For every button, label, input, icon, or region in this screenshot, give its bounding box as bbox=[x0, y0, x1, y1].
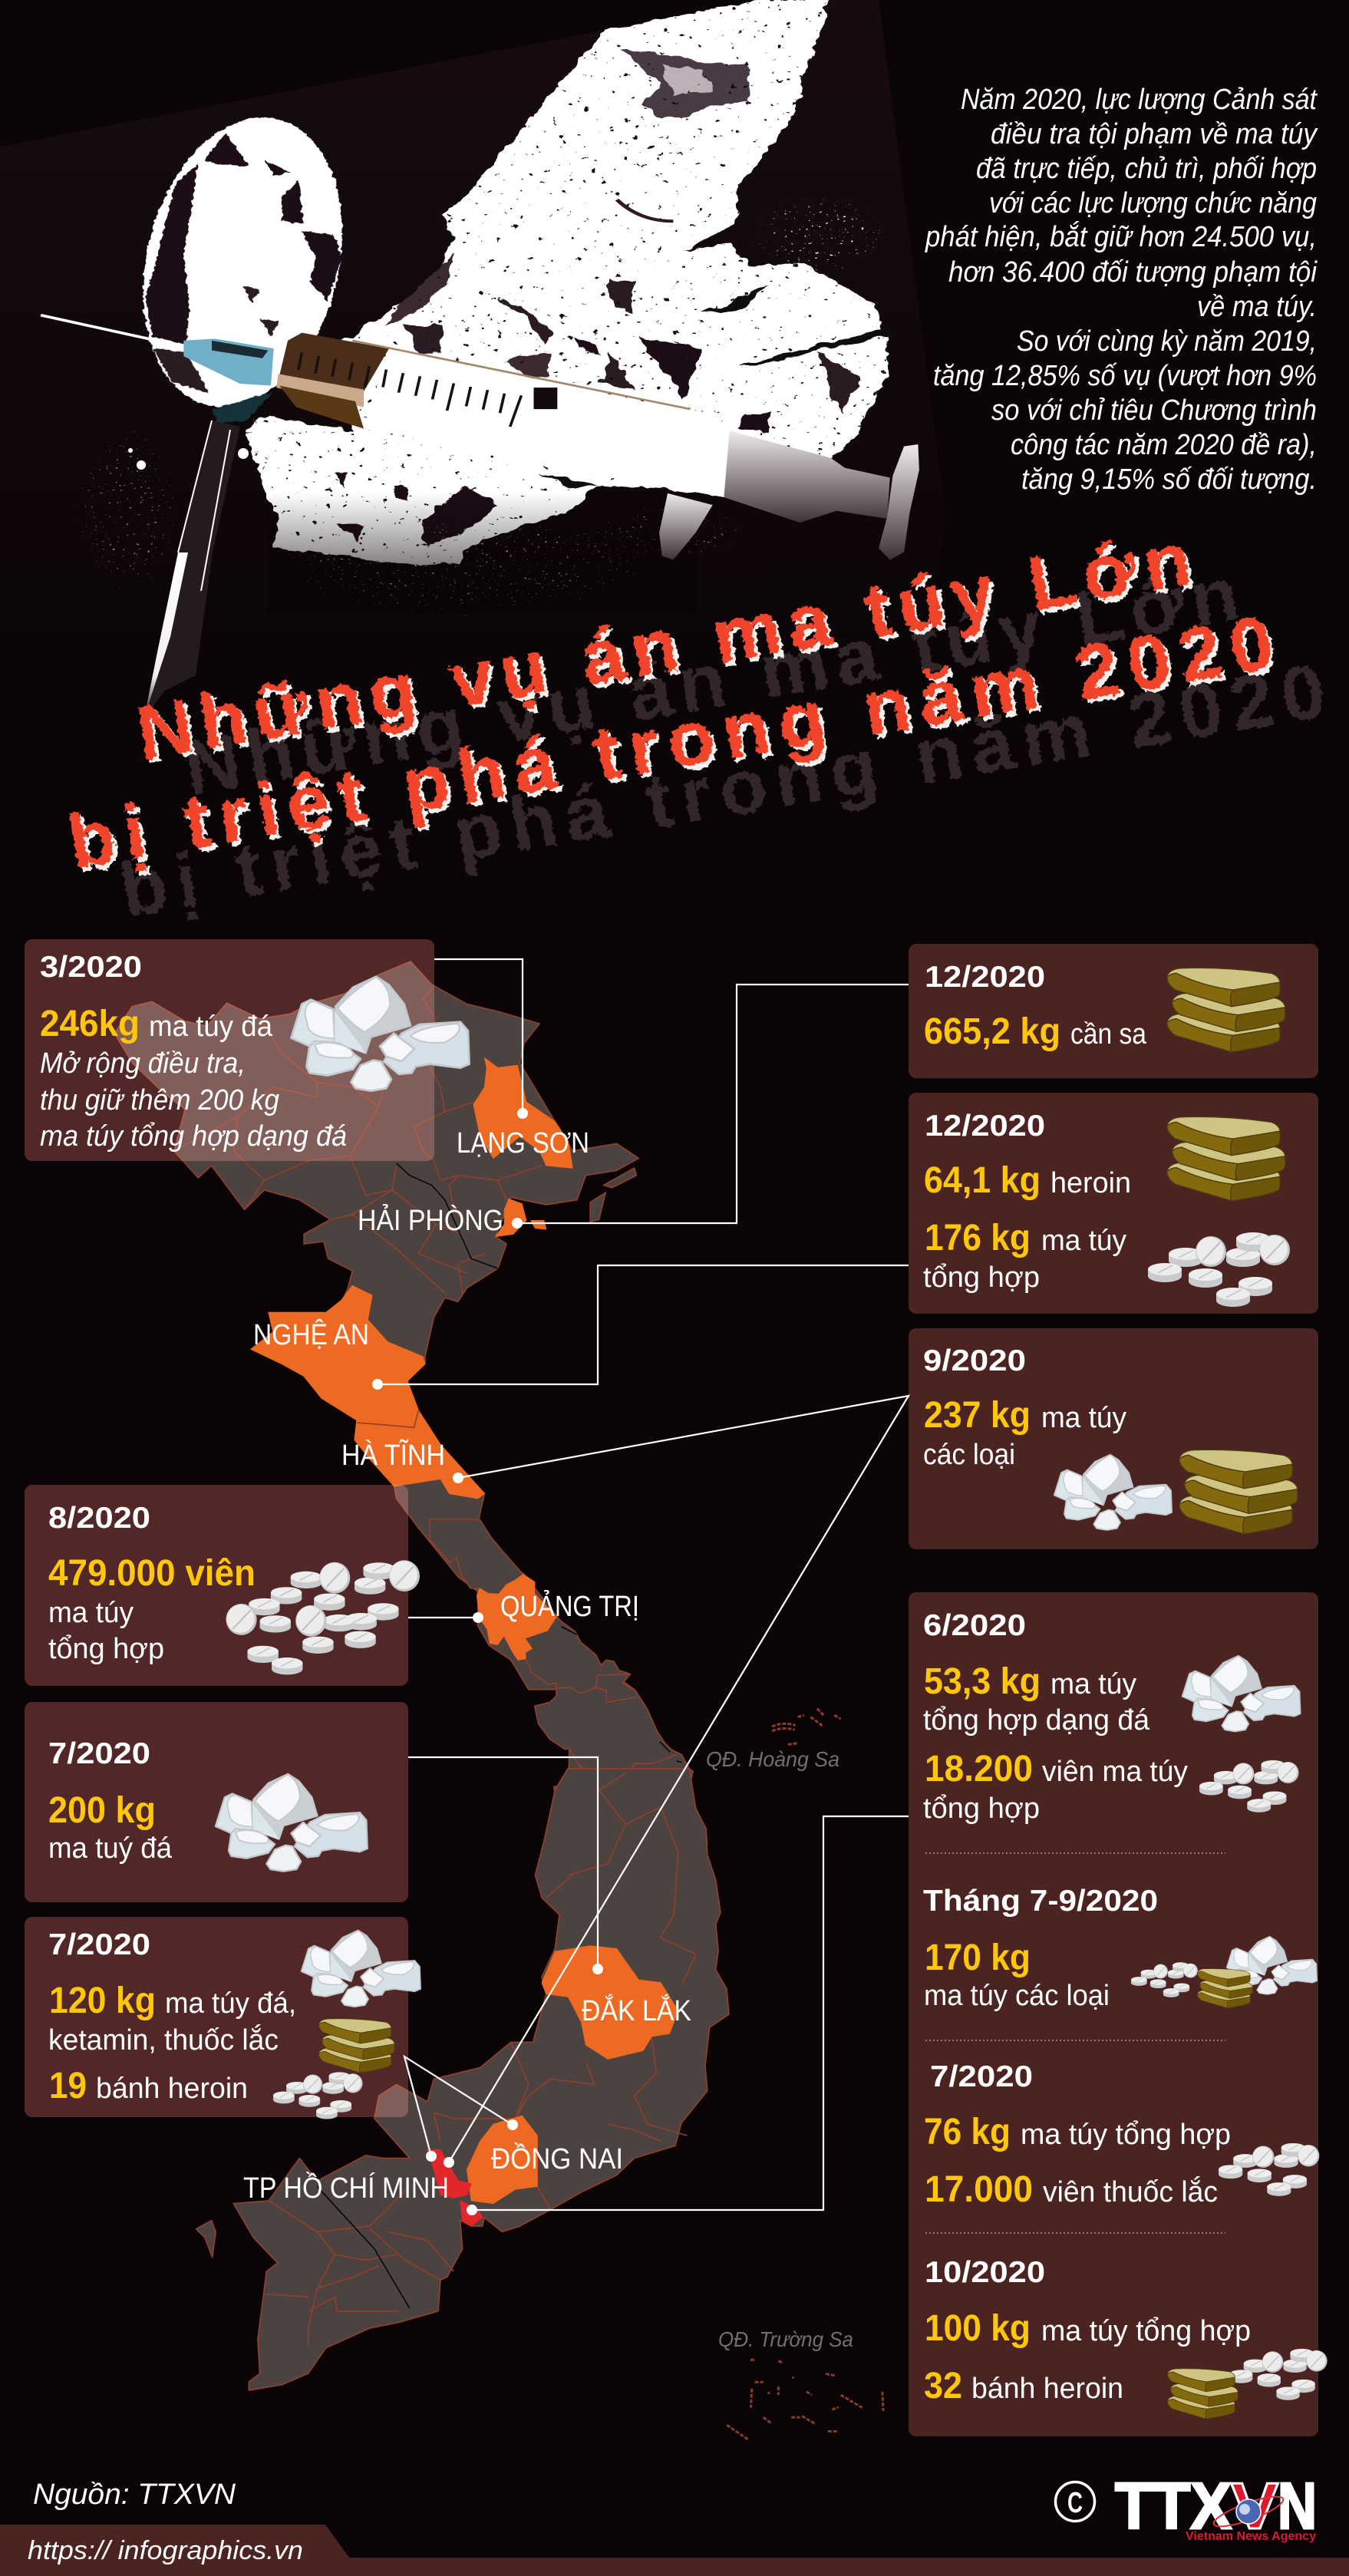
map labels: NGHỆ AN bbox=[253, 1318, 369, 1351]
panel: 6/2020 to 10/2020 list bbox=[909, 1592, 1328, 2436]
panel: 3/2020 bbox=[25, 939, 470, 1161]
panel: 3/2020: 3/2020 bbox=[40, 951, 142, 984]
panel: 7/2020 ice: 7/2020 bbox=[48, 1737, 150, 1770]
panel: 7/2020 ice: 200 kg bbox=[48, 1790, 156, 1831]
location dots bbox=[372, 1108, 603, 2215]
intro paragraph: công tác năm 2020 đề ra), bbox=[1011, 429, 1317, 461]
intro paragraph: với các lực lượng chức năng bbox=[989, 187, 1317, 219]
panel: 12/2020 heroin: 12/2020 bbox=[925, 1110, 1045, 1143]
intro paragraph: So với cùng kỳ năm 2019, bbox=[1017, 325, 1317, 358]
logo: globe bbox=[1211, 2491, 1286, 2532]
panel: 6/2020 to 10/2020 list: 6/2020 bbox=[923, 1609, 1026, 1642]
photo: syringe bbox=[276, 333, 919, 560]
map labels: QUẢNG TRỊ bbox=[500, 1589, 639, 1623]
panel: 7/2020 mixed bbox=[25, 1917, 421, 2119]
panel: 7/2020 ice: ma tuý đá bbox=[48, 1832, 173, 1865]
panel: 8/2020: ma túy bbox=[48, 1597, 134, 1629]
panel: 12/2020 cannabis: 12/2020 bbox=[925, 961, 1045, 994]
map labels: HẢI PHÒNG bbox=[358, 1203, 503, 1237]
title: Những vụ án ma túy Lớn bbox=[130, 516, 1197, 777]
panel: 3/2020: thu giữ thêm 200 kg bbox=[40, 1084, 279, 1116]
logo: TTXVN: N bbox=[1278, 2470, 1317, 2543]
panel: 6/2020 to 10/2020 list: tổng hợp dạng đá bbox=[923, 1704, 1150, 1737]
panel: 8/2020: 8/2020 bbox=[48, 1502, 150, 1535]
panel: 12/2020 heroin: tổng hợp bbox=[923, 1262, 1040, 1294]
copyright symbol: C bbox=[1067, 2487, 1083, 2519]
photo: spoon handle bbox=[128, 421, 249, 717]
map: central region bbox=[430, 1519, 707, 1844]
panel: 7/2020 mixed: 7/2020 bbox=[48, 1928, 150, 1961]
panel: 9/2020: ma túy bbox=[1041, 1402, 1126, 1434]
panel: 12/2020 heroin bbox=[909, 1093, 1318, 1314]
panel: 6/2020 to 10/2020 list: tổng hợp bbox=[923, 1793, 1040, 1825]
panel: 12/2020 heroin: 64,1 kg bbox=[924, 1160, 1041, 1201]
panel: 7/2020 mixed: 120 kg bbox=[49, 1981, 156, 2021]
panel: 6/2020 to 10/2020 list: 32 bbox=[924, 2366, 962, 2406]
title ghost shadow: Những vụ án ma túy Lớn bbox=[178, 551, 1245, 812]
panel: 6/2020 to 10/2020 list: ma túy tổng hợp bbox=[1041, 2315, 1251, 2347]
panel: 9/2020: 9/2020 bbox=[923, 1344, 1026, 1377]
panel: 8/2020: tổng hợp bbox=[48, 1633, 164, 1665]
map labels: TP HỒ CHÍ MINH bbox=[243, 2171, 449, 2205]
source: Nguồn: TTXVN bbox=[33, 2479, 236, 2511]
map labels bbox=[243, 1127, 691, 2205]
panel: 6/2020 to 10/2020 list: 100 kg bbox=[925, 2308, 1031, 2349]
panel: 7/2020 mixed: ketamin, thuốc lắc bbox=[48, 2024, 279, 2057]
title: bị triệt phá trong năm 2020 bbox=[61, 599, 1279, 886]
panel: 6/2020 to 10/2020 list: viên thuốc lắc bbox=[1043, 2175, 1218, 2208]
map labels: LẠNG SƠN bbox=[457, 1127, 589, 1159]
panel: 6/2020 to 10/2020 list: 76 kg bbox=[924, 2112, 1011, 2152]
panel: 9/2020: 237 kg bbox=[924, 1395, 1031, 1436]
panel: 7/2020 ice bbox=[25, 1702, 408, 1902]
photo: spoon bbox=[121, 110, 364, 423]
logo: TTXVN: Vietnam News Agency bbox=[1186, 2530, 1316, 2543]
map: Hoàng Sa islands bbox=[772, 1709, 841, 1744]
panel: 6/2020 to 10/2020 list: 7/2020 bbox=[930, 2060, 1033, 2093]
photo: spoon, syringe and white powder bbox=[0, 0, 946, 767]
photo: fade of the powder bbox=[268, 493, 696, 615]
footer bar with website: https:// infographics.vn bbox=[28, 2536, 303, 2565]
map labels: HÀ TĨNH bbox=[341, 1439, 445, 1472]
panel: 12/2020 heroin: 176 kg bbox=[925, 1218, 1031, 1258]
map: northern region bbox=[114, 961, 638, 1690]
photo: bag crease bbox=[617, 200, 673, 221]
map: southern region bbox=[196, 1769, 729, 2390]
panel: 7/2020 mixed: ma túy đá, bbox=[165, 1987, 296, 2020]
panel: 6/2020 to 10/2020 list: 18.200 bbox=[925, 1749, 1033, 1789]
intro paragraph: về ma túy. bbox=[1197, 291, 1317, 323]
intro paragraph: Năm 2020, lực lượng Cảnh sát bbox=[961, 84, 1318, 116]
panel: 3/2020: 246kg bbox=[40, 1004, 140, 1044]
icon: pile of pills bbox=[226, 1560, 420, 1674]
panel: 8/2020: 479.000 viên bbox=[48, 1553, 256, 1594]
panel: 6/2020 to 10/2020 list: 170 kg bbox=[925, 1938, 1031, 1978]
panel: 12/2020 heroin: ma túy bbox=[1041, 1225, 1126, 1257]
island label: Trường Sa: QĐ. Trường Sa bbox=[718, 2327, 853, 2351]
intro paragraph: tăng 12,85% số vụ (vượt hơn 9% bbox=[933, 360, 1317, 392]
photo: scattered powder bbox=[77, 196, 887, 618]
map of Vietnam bbox=[114, 961, 883, 2439]
intro paragraph: tăng 9,15% số đối tượng. bbox=[1021, 463, 1317, 496]
map labels: ĐỒNG NAI bbox=[491, 2142, 623, 2175]
panel: 12/2020 cannabis bbox=[909, 944, 1318, 1078]
map: Trường Sa islands bbox=[727, 2360, 883, 2439]
logo: TTXVN bbox=[1115, 2470, 1317, 2543]
panel: 9/2020 bbox=[909, 1328, 1318, 1549]
photo: needle and hub bbox=[41, 315, 274, 386]
panel: 6/2020 to 10/2020 list: viên ma túy bbox=[1042, 1756, 1188, 1788]
title: Những vụ án ma túy Lớn bbox=[134, 519, 1201, 780]
intro paragraph: điều tra tội phạm về ma túy bbox=[991, 118, 1318, 150]
island label: Hoàng Sa: QĐ. Hoàng Sa bbox=[706, 1747, 839, 1771]
intro paragraph: so với chỉ tiêu Chương trình bbox=[991, 394, 1317, 427]
logo: TTXVN: V bbox=[1231, 2470, 1278, 2543]
title ghost shadow: bị triệt phá trong năm 2020 bbox=[114, 648, 1331, 934]
panel: 6/2020 to 10/2020 list: 53,3 kg bbox=[924, 1661, 1041, 1702]
panel: 6/2020 to 10/2020 list: Tháng 7-9/2020 bbox=[923, 1885, 1158, 1918]
logo: TTXVN: TTX bbox=[1115, 2470, 1232, 2543]
panel: 3/2020: ma túy tổng hợp dạng đá bbox=[40, 1120, 347, 1153]
copyright symbol bbox=[1056, 2482, 1094, 2522]
panel: 9/2020: các loại bbox=[923, 1439, 1015, 1471]
panel: 6/2020 to 10/2020 list: ma túy các loại bbox=[924, 1980, 1110, 2012]
map labels: ĐẮK LẮK bbox=[582, 1994, 691, 2027]
panel: 3/2020: Mở rộng điều tra, bbox=[40, 1047, 246, 1080]
panel: 7/2020 mixed: 19 bbox=[49, 2066, 87, 2106]
panel: 12/2020 cannabis: cần sa bbox=[1070, 1018, 1147, 1051]
connector lines bbox=[378, 959, 909, 2210]
panel: 12/2020 heroin: heroin bbox=[1051, 1167, 1131, 1199]
intro paragraph bbox=[925, 84, 1318, 496]
panel: 6/2020 to 10/2020 list: ma túy tổng hợp bbox=[1021, 2119, 1231, 2151]
panel: 6/2020 to 10/2020 list: ma túy bbox=[1051, 1668, 1136, 1700]
intro paragraph: đã trực tiếp, chủ trì, phối hợp bbox=[976, 153, 1317, 185]
panel: 6/2020 to 10/2020 list: 10/2020 bbox=[925, 2256, 1045, 2289]
footer bar with website bbox=[0, 2525, 1349, 2576]
panel: 6/2020 to 10/2020 list: 17.000 bbox=[925, 2169, 1033, 2210]
intro paragraph: hơn 36.400 đối tượng phạm tội bbox=[948, 256, 1318, 289]
photo: bag and powder bbox=[246, 0, 890, 564]
panel: 7/2020 mixed: bánh heroin bbox=[96, 2073, 248, 2105]
panel: 12/2020 cannabis: 665,2 kg bbox=[924, 1011, 1060, 1052]
panel: 3/2020: ma túy đá bbox=[149, 1011, 273, 1043]
intro paragraph: phát hiện, bắt giữ hơn 24.500 vụ, bbox=[925, 220, 1317, 253]
panel: 8/2020 bbox=[25, 1485, 420, 1686]
title: bị triệt phá trong năm 2020 bbox=[65, 603, 1283, 889]
panel: 6/2020 to 10/2020 list: bánh heroin bbox=[971, 2373, 1123, 2405]
